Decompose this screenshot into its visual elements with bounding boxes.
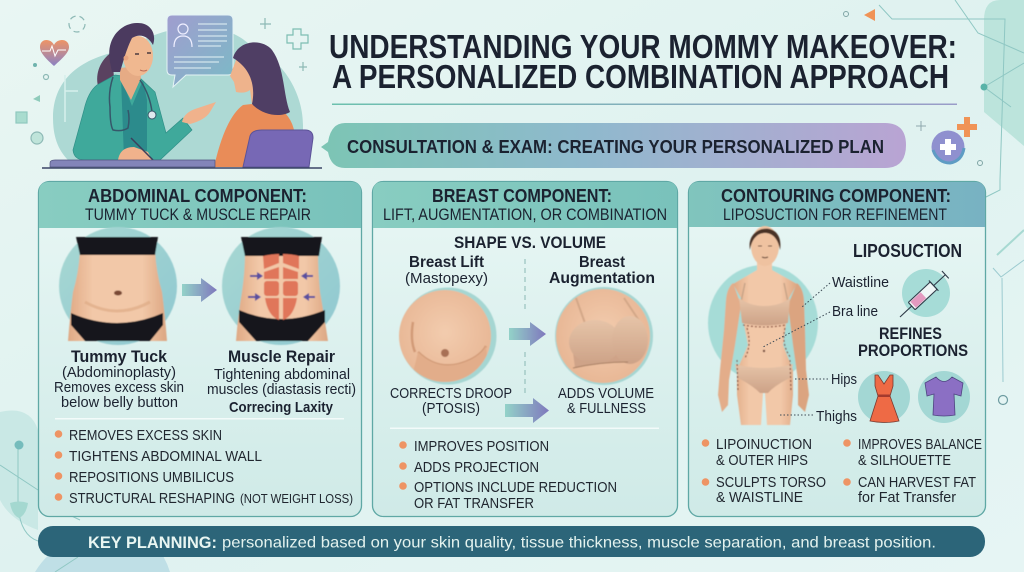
arrow: [182, 278, 217, 302]
photo: after torso with muscles: [222, 227, 340, 345]
area labels: Bra line: [832, 303, 878, 320]
photo: breast lift: [395, 285, 496, 390]
bullet list: IMPROVES BALANCE: [858, 437, 982, 453]
panel header: [39, 182, 361, 228]
photo: before torso: [59, 227, 177, 345]
liposuction heading: LIPOSUCTION: [853, 241, 962, 261]
bullet list: OR FAT TRANSFER: [414, 496, 534, 512]
tummy tuck caption: Tummy Tuck: [71, 347, 168, 366]
breast captions: [390, 385, 654, 417]
bullet list: & WAISTLINE: [716, 490, 803, 506]
muscle repair caption: Tightening abdominal: [214, 366, 350, 383]
breast captions: ADDS VOLUME: [558, 385, 654, 402]
refines proportions: REFINES: [879, 324, 942, 343]
footer: key planning: personalized based on your skin quality, tissue thickness, muscle separation, and breast position.: [222, 534, 936, 552]
bullet list: REMOVES EXCESS SKIN: [69, 428, 222, 444]
muscle repair caption: muscles (diastasis recti): [207, 381, 356, 398]
breast lift label: Breast Lift: [409, 254, 485, 271]
icon: medical badge: [916, 117, 977, 164]
tummy tuck caption: [54, 347, 184, 411]
bullet list: IMPROVES POSITION: [414, 439, 549, 455]
bullet list: [399, 439, 617, 512]
panel header: [689, 182, 985, 227]
panel: abdominal component: [38, 182, 362, 516]
bullet list: SCULPTS TORSO: [716, 475, 826, 491]
icon: heart: [40, 40, 69, 66]
panel header: LIPOSUCTION FOR REFINEMENT: [723, 206, 947, 224]
arrow: [509, 322, 546, 346]
illustration: consultation: [16, 15, 322, 168]
bullet list: & OUTER HIPS: [716, 453, 808, 469]
panel header: [373, 182, 677, 228]
chat bubble: [167, 15, 233, 87]
bullet list: LIPOINUCTION: [716, 437, 812, 453]
area labels: [816, 274, 889, 425]
bullet list: [702, 437, 982, 506]
consultation banner: [321, 123, 906, 168]
area labels: Waistline: [832, 274, 889, 291]
bullet list: STRUCTURAL RESHAPING: [69, 491, 235, 507]
tummy tuck caption: (Abdominoplasty): [62, 364, 176, 381]
panel header: ABDOMINAL COMPONENT:: [88, 186, 307, 206]
refines proportions: [858, 324, 968, 360]
arrow: [505, 398, 549, 423]
bullet list: [55, 428, 353, 507]
bullet list: ADDS PROJECTION: [414, 460, 539, 476]
patient: [214, 42, 313, 167]
panel header: LIFT, AUGMENTATION, OR COMBINATION: [383, 206, 667, 224]
breast captions: CORRECTS DROOP: [390, 385, 512, 402]
white cross lines: [65, 75, 78, 122]
bullet list: & SILHOUETTE: [858, 453, 951, 469]
title: [329, 28, 957, 95]
panel: contouring component: [688, 182, 986, 516]
muscle repair caption: Muscle Repair: [228, 347, 335, 366]
background decoration right: [844, 0, 1024, 404]
tummy tuck caption: Removes excess skin: [54, 379, 184, 396]
small shapes: [16, 16, 308, 144]
muscle repair caption: Correcing Laxity: [229, 399, 334, 416]
breast augmentation label: Augmentation: [549, 270, 655, 287]
teal blob background: [53, 27, 303, 166]
bullet list: (NOT WEIGHT LOSS): [240, 492, 353, 506]
bullet list: for Fat Transfer: [858, 490, 956, 506]
panel header: CONTOURING COMPONENT:: [721, 186, 951, 206]
footer: key planning: [38, 526, 985, 557]
panel: breast component: [372, 182, 678, 516]
icon: dress: [858, 371, 910, 423]
bullet list: TIGHTENS ABDOMINAL WALL: [69, 449, 262, 465]
breast captions: & FULLNESS: [567, 400, 646, 417]
muscle repair caption: [207, 347, 356, 416]
panel header: BREAST COMPONENT:: [432, 186, 612, 206]
desk: [42, 160, 322, 168]
bullet list: OPTIONS INCLUDE REDUCTION: [414, 480, 617, 496]
icon: shirt: [918, 371, 970, 423]
breast augmentation label: [549, 254, 655, 287]
photo: breast augmentation: [555, 285, 653, 390]
doctor: [73, 23, 216, 160]
bullet list: CAN HARVEST FAT: [858, 475, 976, 491]
icon: syringe: [895, 269, 950, 322]
breast captions: (PTOSIS): [422, 400, 480, 417]
breast lift label: [405, 254, 488, 287]
breast augmentation label: Breast: [579, 254, 626, 271]
footer: key planning: KEY PLANNING:: [88, 533, 217, 552]
area labels: Thighs: [816, 408, 857, 425]
title rule: [332, 104, 957, 105]
tummy tuck caption: below belly button: [61, 394, 178, 411]
panel header: TUMMY TUCK & MUSCLE REPAIR: [85, 206, 311, 224]
subheading: SHAPE VS. VOLUME: [454, 233, 606, 252]
area labels: Hips: [831, 371, 857, 388]
figure with treatment areas: [708, 226, 818, 425]
breast lift label: (Mastopexy): [405, 270, 488, 287]
refines proportions: PROPORTIONS: [858, 341, 968, 360]
consultation banner: CONSULTATION & EXAM: CREATING YOUR PERSONALIZED PLAN: [347, 137, 884, 157]
bullet list: REPOSITIONS UMBILICUS: [69, 470, 234, 486]
background decoration left: [0, 410, 170, 572]
leader lines: [763, 283, 830, 415]
